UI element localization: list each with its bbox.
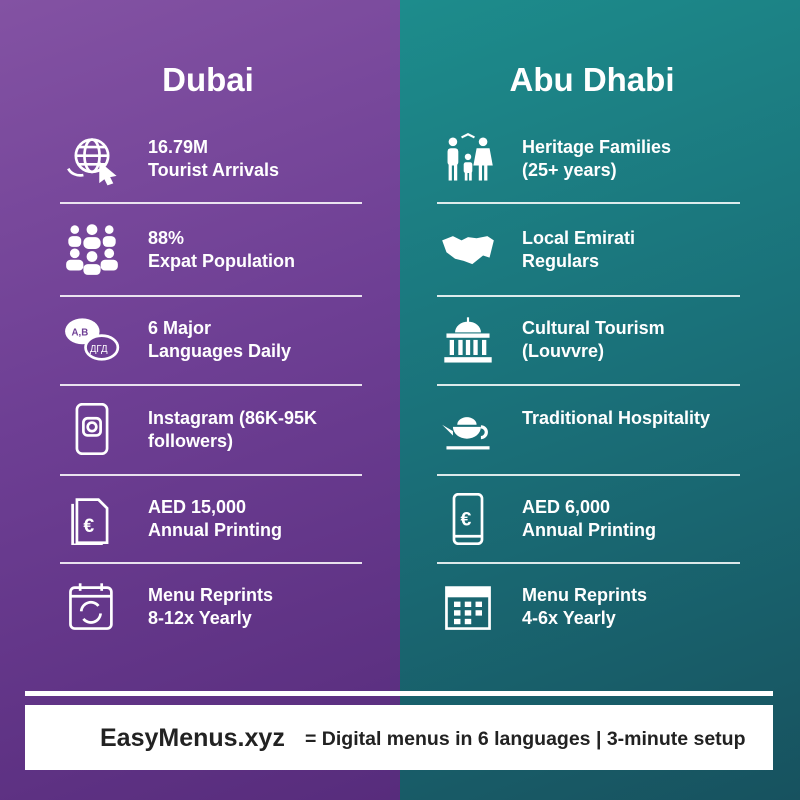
- stat: reprints: [522, 585, 647, 628]
- stat: expat: 88%: [148, 228, 184, 248]
- icon: teapot: [442, 417, 490, 450]
- stat: languages: [148, 318, 291, 361]
- title: Dubai: Dubai: [162, 61, 254, 98]
- stat: tourist: Tourist Arrivals: [148, 160, 279, 180]
- stat: cultural: [522, 318, 665, 361]
- stat: printing: Annual Printing: [148, 520, 282, 540]
- stat: printing: AED 6,000: [522, 497, 610, 517]
- panel: Dubai: [0, 0, 400, 800]
- stat: reprints: [148, 585, 273, 628]
- icon: document euro: [71, 498, 108, 545]
- icon: people: [66, 224, 118, 275]
- stat: reprints: 8-12x Yearly: [148, 608, 252, 628]
- icon: speech bubbles: ДГД: [90, 344, 108, 355]
- brand: EasyMenus.xyz: [100, 724, 285, 752]
- stat: printing: [148, 497, 282, 540]
- icon: calendar grid: [445, 586, 491, 630]
- stat: printing: AED 15,000: [148, 497, 246, 517]
- icon: globe: [67, 138, 116, 186]
- panel: Abu Dhabi: [400, 0, 800, 800]
- stat: reprints: 4-6x Yearly: [522, 608, 616, 628]
- stat: emirati: Regulars: [522, 251, 599, 271]
- icon: handshake: [442, 236, 494, 264]
- icon: phone instagram: [76, 403, 108, 455]
- stat: families: Heritage Families: [522, 137, 671, 157]
- stat: languages: Languages Daily: [148, 341, 291, 361]
- icon: phone euro: €: [460, 508, 471, 530]
- stat: emirati: Local Emirati: [522, 228, 635, 248]
- stat: emirati: [522, 228, 635, 271]
- stat: languages: 6 Major: [148, 318, 211, 338]
- stat: instagram: Instagram (86K-95K: [148, 408, 317, 428]
- icon: speech bubbles: [65, 318, 120, 361]
- title: Abu Dhabi: Abu Dhabi: [510, 61, 674, 98]
- stat: cultural: Cultural Tourism: [522, 318, 665, 338]
- icon: family: [448, 133, 493, 181]
- stat: instagram: followers): [148, 431, 233, 451]
- stat: printing: [522, 497, 656, 540]
- stat: hospitality: Traditional Hospitality: [522, 408, 710, 428]
- footer banner: [25, 705, 773, 770]
- stat: tourist: 16.79M: [148, 137, 208, 157]
- stat: families: [522, 137, 671, 180]
- stat: families: (25+ years): [522, 160, 617, 180]
- stat: instagram: [148, 408, 317, 451]
- icon: calendar refresh: [69, 583, 113, 630]
- icon: document euro: €: [83, 515, 94, 537]
- stat: cultural: (Louvvre): [522, 341, 604, 361]
- stat: reprints: Menu Reprints: [522, 585, 647, 605]
- stat: printing: Annual Printing: [522, 520, 656, 540]
- tagline: = Digital menus in 6 languages | 3-minute setup: [305, 728, 746, 750]
- icon: museum: [444, 317, 492, 363]
- icon: speech bubbles: A,B: [72, 328, 88, 339]
- stat: expat: [148, 228, 295, 271]
- stat: reprints: Menu Reprints: [148, 585, 273, 605]
- stat: tourist: [148, 137, 279, 180]
- stat: expat: Expat Population: [148, 251, 295, 271]
- icon: phone euro: [452, 493, 484, 545]
